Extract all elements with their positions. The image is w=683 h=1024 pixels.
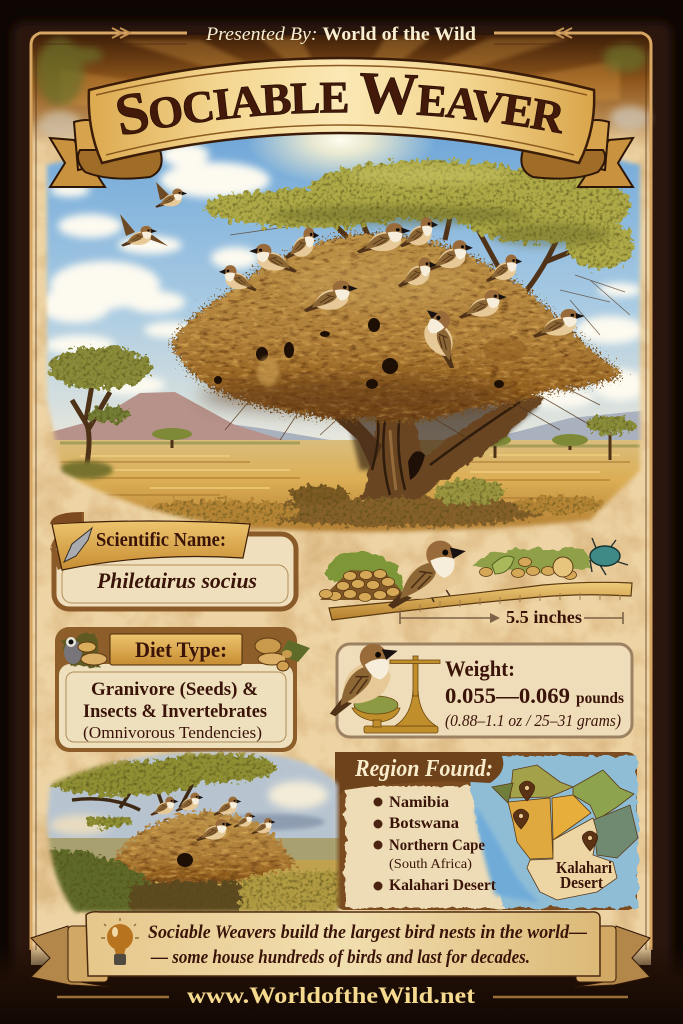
footer url: www.WorldoftheWild.net (187, 983, 475, 1008)
acacia canopy (205, 160, 634, 345)
fact banner (31, 912, 650, 987)
weight text (445, 656, 624, 730)
left ribbon tail (31, 926, 110, 987)
leaves behind seeds (322, 548, 592, 590)
length illustration: ruler with bird (320, 536, 632, 627)
hero illustration: nest tree in savanna (44, 134, 643, 535)
clouds (39, 143, 648, 408)
diet description: (Omnivorous Tendencies) (83, 723, 262, 742)
panel: region found (335, 752, 638, 910)
weight text: Weight: (445, 656, 515, 681)
foreground bushes (40, 849, 345, 915)
banner body (86, 912, 600, 976)
left ribbon tail (50, 120, 162, 187)
bird on ruler (378, 536, 473, 609)
presented by line: Presented By: World of the Wild (205, 24, 476, 45)
distant mountains (51, 392, 642, 440)
sun glow (250, 134, 432, 181)
right ribbon tail (521, 120, 633, 187)
length dimension (400, 607, 623, 627)
map label: Desert (560, 873, 603, 892)
left tree (48, 347, 152, 479)
sky (40, 130, 650, 450)
icon: balance scale (352, 656, 440, 733)
banner body (89, 58, 594, 163)
trunk (225, 385, 600, 502)
map label: Kalahari (556, 858, 612, 877)
scientific name value: Philetairus socius (96, 568, 257, 593)
title banner (48, 56, 635, 188)
length dimension: 5.5 inches (506, 607, 582, 627)
weight text: 0.055—0.069 (445, 683, 570, 708)
plank heading: diet type (110, 634, 242, 665)
weight text: pounds (576, 690, 624, 707)
region list: (South Africa) (389, 857, 472, 872)
region list: Kalahari Desert (389, 877, 497, 894)
fact text (148, 923, 587, 968)
icon: bird and seeds (62, 632, 107, 668)
icon: quill (64, 528, 92, 562)
weight text: (0.88–1.1 oz / 25–31 grams) (445, 711, 621, 730)
map pins (513, 781, 598, 851)
map of southern Africa (492, 765, 638, 900)
lower scene: ground-level nest (40, 750, 345, 918)
water (470, 756, 638, 908)
ribbon heading: scientific name: Scientific Name: (96, 529, 226, 551)
fact text: Sociable Weavers build the largest bird nests in the world— (148, 923, 587, 943)
flying birds (120, 182, 187, 246)
savanna ground (40, 440, 650, 540)
foreground grass (140, 479, 605, 527)
left seed pile (320, 570, 405, 602)
right ribbon tail (574, 926, 650, 987)
heading: region found: Region Found: (354, 756, 493, 782)
panel: diet type (55, 627, 310, 752)
icon: light bulb (101, 918, 139, 965)
right seed pile (480, 556, 576, 580)
ribbon heading: scientific name (50, 512, 250, 570)
panel: weight (313, 637, 632, 737)
distant trees (152, 416, 635, 460)
diet description: Insects & Invertebrates (83, 701, 267, 722)
region list (374, 794, 497, 894)
foliage in top corners (36, 38, 650, 139)
woven nest (172, 235, 622, 420)
title text: SOCIABLE WEAVER (117, 72, 562, 134)
region list: Namibia (389, 794, 449, 811)
icon: beetle (590, 538, 628, 575)
fact text: — some house hundreds of birds and last for decades. (150, 948, 530, 968)
region list: Northern Cape (389, 837, 485, 854)
map label (556, 858, 612, 892)
icon: nuts and leaves (255, 638, 310, 671)
bird on scale (313, 637, 411, 718)
plank heading: diet type: Diet Type: (135, 637, 227, 662)
ruler (329, 582, 632, 620)
panel: scientific name (50, 512, 296, 609)
dark lower frame area (0, 945, 683, 1024)
ruler ticks (400, 593, 620, 614)
diet description (83, 679, 267, 742)
perched birds (219, 217, 585, 370)
diet description: Granivore (Seeds) & (91, 679, 258, 700)
region list: Botswana (389, 815, 459, 832)
